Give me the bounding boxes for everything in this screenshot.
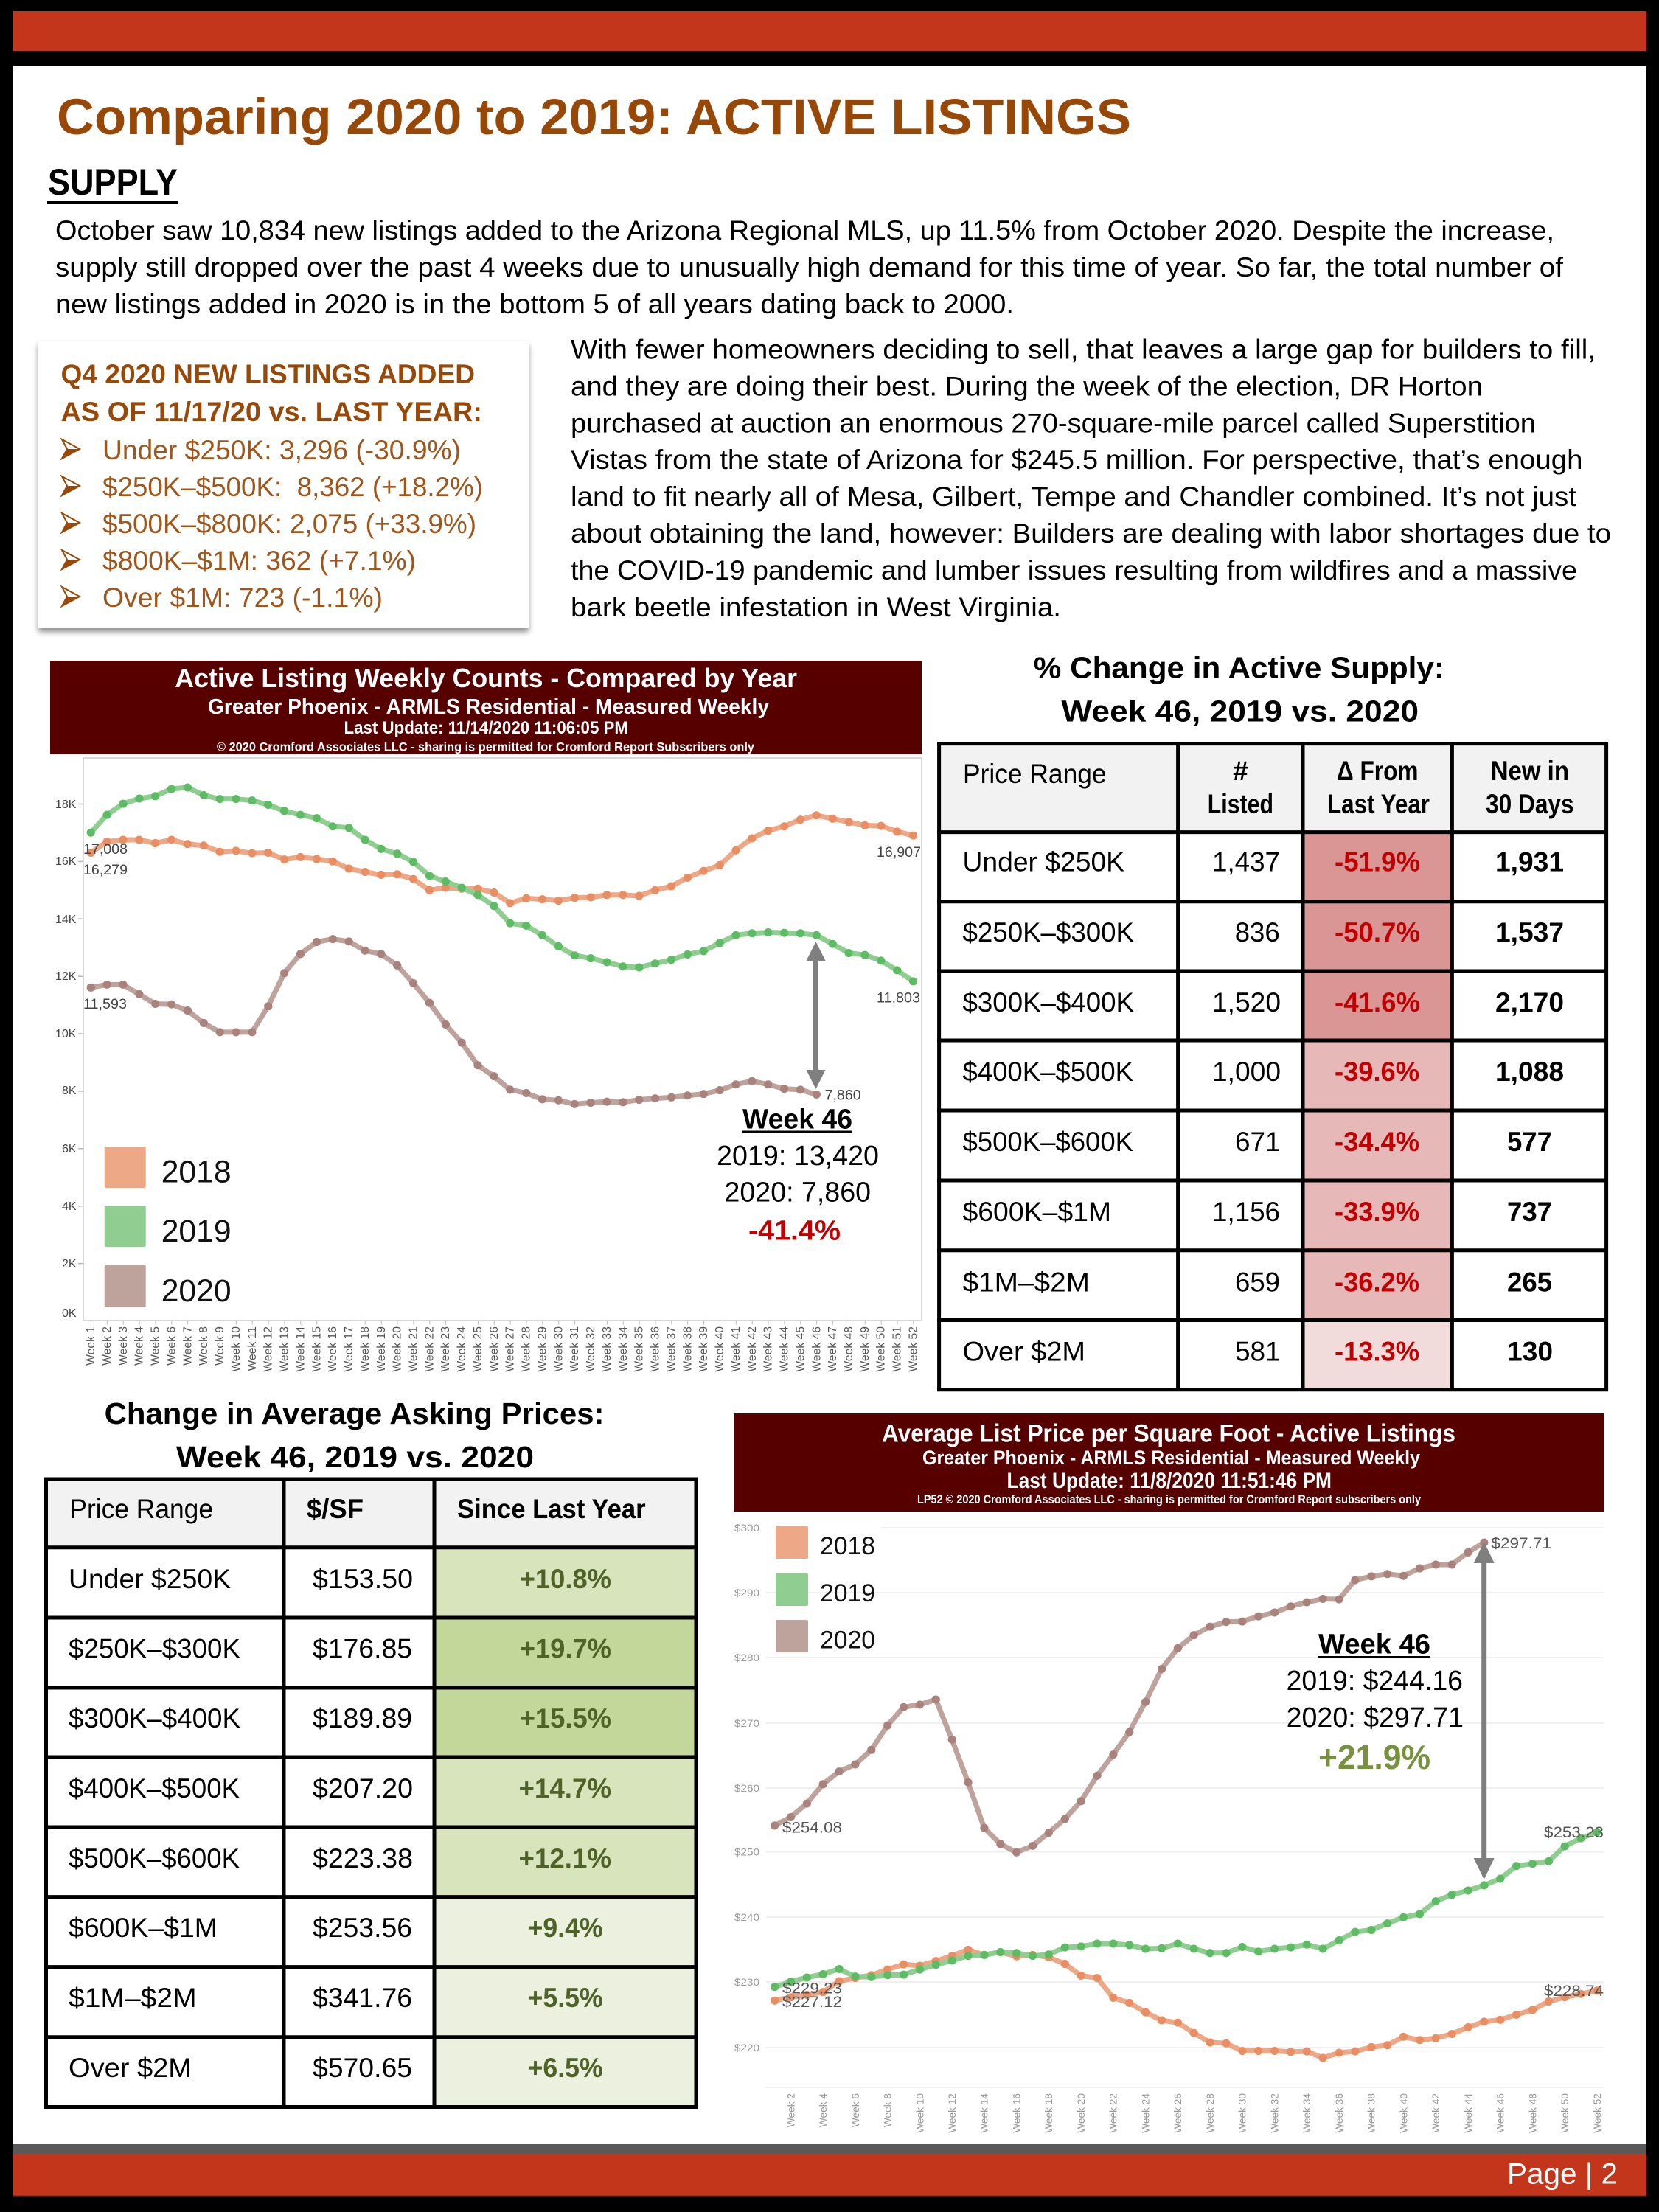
x axis labels: Week 40 xyxy=(714,1326,726,1372)
row: $600K-$1M: -33.9% xyxy=(1335,1197,1419,1227)
x axis labels: Week 18 xyxy=(359,1326,372,1372)
x axis labels: Week 24 xyxy=(456,1326,468,1372)
row: $500K-$600K: +12.1% xyxy=(519,1843,611,1874)
row: $500K-$600K: 577 xyxy=(1507,1127,1552,1157)
x axis labels: Week 6 xyxy=(165,1326,178,1366)
text block: intro paragraph: October saw 10,834 new listings added to the Arizona Regional MLS, up 11.5% from October 2020. Despite the increase, xyxy=(55,215,1554,246)
x axis labels: Week 2 xyxy=(101,1326,114,1366)
y axis labels: 8K xyxy=(62,1085,77,1097)
row: over $2M xyxy=(963,1337,1553,1367)
row: under $250K: +10.8% xyxy=(520,1564,611,1594)
panel: active listing weekly counts chart xyxy=(50,661,922,1372)
text block: builders paragraph: With fewer homeowners deciding to sell, that leaves a large gap for builders to fill, xyxy=(571,335,1596,364)
x axis labels: Week 37 xyxy=(665,1326,678,1372)
table header: Price Range xyxy=(69,1494,213,1524)
row: over $2M: $570.65 xyxy=(313,2053,412,2083)
callout: week 46 counts: 2019: 13,420 xyxy=(717,1141,879,1172)
y axis labels: 14K xyxy=(55,914,77,926)
chart header xyxy=(734,1413,1604,1512)
x axis labels: Week 44 xyxy=(1463,2093,1474,2133)
heading: supply: SUPPLY xyxy=(48,161,178,203)
chart header: Greater Phoenix - ARMLS Residential - Measured Weekly xyxy=(922,1447,1420,1469)
x axis labels: Week 6 xyxy=(850,2093,861,2127)
x axis labels: Week 27 xyxy=(504,1326,517,1372)
y axis labels: $270 xyxy=(734,1717,759,1729)
row: $1M-$2M xyxy=(69,1983,603,2013)
callout: week 46 prices xyxy=(1287,1630,1464,1776)
title: Comparing 2020 to 2019: ACTIVE LISTINGS xyxy=(57,88,1131,145)
x axis labels: Week 30 xyxy=(1237,2093,1248,2133)
x axis labels: Week 35 xyxy=(633,1326,646,1372)
row: $500K-$600K xyxy=(69,1843,611,1874)
row: $1M-$2M: 265 xyxy=(1507,1267,1552,1297)
row: $1M-$2M xyxy=(963,1267,1552,1297)
line series: 2020 xyxy=(91,939,816,1104)
table header: New in xyxy=(1491,756,1569,786)
y axis labels: $240 xyxy=(734,1911,759,1923)
data labels: 11,803 xyxy=(877,991,920,1006)
x axis labels: Week 16 xyxy=(1012,2093,1022,2133)
row: $1M-$2M: $341.76 xyxy=(313,1983,412,2013)
row: over $2M: 130 xyxy=(1507,1337,1553,1367)
legend: 2019 xyxy=(820,1579,875,1607)
callout heading xyxy=(60,359,482,427)
line series: 2020 xyxy=(774,1543,1484,1852)
row: $600K-$1M: $600K–$1M xyxy=(963,1197,1111,1227)
row: $400K-$500K: $400K–$500K xyxy=(963,1057,1133,1087)
row: $500K-$600K: $500K–$600K xyxy=(69,1843,240,1874)
heading: % change in active supply: Week 46, 2019 vs. 2020 xyxy=(1061,695,1419,728)
x axis labels: Week 13 xyxy=(279,1326,291,1372)
x axis labels: Week 12 xyxy=(262,1326,275,1372)
y axis labels: $280 xyxy=(734,1652,759,1663)
x axis labels: Week 20 xyxy=(392,1326,404,1372)
row: $300K-$400K xyxy=(69,1703,611,1733)
x axis labels: Week 28 xyxy=(1205,2093,1216,2133)
x axis labels: Week 46 xyxy=(1495,2093,1506,2133)
row: $300K-$400K: $300K–$400K xyxy=(69,1703,240,1733)
x axis labels: Week 42 xyxy=(1430,2093,1441,2133)
table header: $/SF xyxy=(307,1494,364,1524)
x axis labels: Week 14 xyxy=(979,2093,990,2133)
x axis labels: Week 44 xyxy=(779,1326,790,1372)
row: $250K-$300K: $176.85 xyxy=(313,1634,412,1664)
line series: 2018 xyxy=(91,815,914,903)
arrow: week 46 gap xyxy=(807,942,826,1089)
row: under $250K xyxy=(69,1564,611,1594)
callout heading: AS OF 11/17/20 vs. LAST YEAR: xyxy=(60,397,482,427)
x axis labels: Week 32 xyxy=(585,1326,597,1372)
row: $300K-$400K: $189.89 xyxy=(313,1703,412,1733)
text block: builders paragraph: Vistas from the state of Arizona for $245.5 million. For perspective, that’s enough xyxy=(571,445,1582,475)
x axis labels: Week 9 xyxy=(214,1326,226,1366)
row: $400K-$500K: +14.7% xyxy=(519,1773,611,1804)
x axis labels: Week 41 xyxy=(730,1326,742,1372)
legend xyxy=(776,1526,875,1655)
line series: 2019 xyxy=(774,1832,1597,1987)
line series: 2018 xyxy=(774,1950,1597,2058)
table header: Price Range xyxy=(963,759,1107,789)
x axis labels xyxy=(85,1326,920,1372)
row: under $250K: -51.9% xyxy=(1335,847,1420,877)
row: $600K-$1M: $253.56 xyxy=(313,1913,412,1943)
x axis labels: Week 5 xyxy=(150,1326,162,1366)
panel: average list price per square foot chart xyxy=(734,1413,1604,2133)
data labels: $228.74 xyxy=(1544,1983,1604,2000)
y axis labels: 12K xyxy=(55,970,77,983)
page number: Page | 2 xyxy=(1507,2158,1618,2191)
text block: builders paragraph xyxy=(571,335,1611,622)
legend: 2020 xyxy=(820,1627,875,1655)
row: $600K-$1M xyxy=(963,1197,1552,1227)
text block: builders paragraph: about obtaining the land, however: Builders are dealing with labor shortages due to xyxy=(571,518,1611,549)
x axis labels: Week 30 xyxy=(552,1326,565,1372)
x axis labels: Week 48 xyxy=(843,1326,855,1372)
bottom footer bar xyxy=(13,2144,1646,2196)
x axis labels: Week 10 xyxy=(230,1326,243,1372)
callout: week 46 counts: 2020: 7,860 xyxy=(724,1177,871,1208)
callout: week 46 counts xyxy=(717,1105,879,1246)
row: over $2M: -13.3% xyxy=(1335,1337,1419,1367)
x axis labels: Week 36 xyxy=(650,1326,662,1372)
x axis labels: Week 34 xyxy=(1301,2093,1312,2133)
data labels: $229.23 xyxy=(782,1980,842,1997)
x axis labels: Week 51 xyxy=(891,1326,904,1372)
x axis labels: Week 33 xyxy=(601,1326,613,1372)
x axis labels: Week 7 xyxy=(181,1326,194,1366)
x axis labels: Week 11 xyxy=(246,1326,259,1371)
callout: week 46 prices: 2020: $297.71 xyxy=(1287,1703,1464,1733)
data labels: 16,279 xyxy=(83,863,128,878)
text block: builders paragraph: land to fit nearly all of Mesa, Gilbert, Tempe and Chandler combined. It’s not just xyxy=(571,481,1577,512)
y axis labels: $290 xyxy=(734,1587,759,1599)
row: $300K-$400K: $300K–$400K xyxy=(963,987,1134,1018)
line series: 2019 xyxy=(91,787,914,981)
x axis labels: Week 22 xyxy=(423,1326,436,1372)
y axis labels: 0K xyxy=(62,1307,77,1320)
heading: % change in active supply xyxy=(1034,651,1444,728)
x axis labels: Week 47 xyxy=(827,1326,839,1372)
callout bullet: $800K-$1M: $800K–$1M: 362 (+7.1%) xyxy=(102,546,416,576)
callout bullet: $500K-$800K: $500K–$800K: 2,075 (+33.9%) xyxy=(102,509,476,539)
legend: 2018 xyxy=(820,1532,875,1560)
x axis labels: Week 3 xyxy=(117,1326,130,1366)
row: $600K-$1M: $600K–$1M xyxy=(69,1913,218,1943)
x axis labels: Week 19 xyxy=(375,1326,388,1372)
row: under $250K: 1,437 xyxy=(1212,847,1280,877)
x axis labels: Week 16 xyxy=(327,1326,339,1372)
x axis labels: Week 48 xyxy=(1527,2093,1538,2133)
heading: change in average asking prices: Week 46, 2019 vs. 2020 xyxy=(176,1440,534,1474)
row: $500K-$600K: -34.4% xyxy=(1335,1127,1419,1157)
data labels: $297.71 xyxy=(1491,1535,1551,1552)
y axis labels: 10K xyxy=(55,1028,77,1040)
legend: 2019 xyxy=(161,1214,232,1249)
callout bullet: under $250K: Under $250K: 3,296 (-30.9%) xyxy=(102,435,461,465)
row: $300K-$400K: 1,520 xyxy=(1212,987,1281,1018)
y axis labels: $260 xyxy=(734,1782,759,1794)
row: $300K-$400K: +15.5% xyxy=(520,1703,611,1733)
row: $500K-$600K xyxy=(963,1127,1552,1157)
y axis labels: 18K xyxy=(55,799,77,811)
row: under $250K: 1,931 xyxy=(1495,847,1564,877)
y axis labels: 16K xyxy=(55,855,77,868)
table header xyxy=(69,1494,646,1524)
data labels xyxy=(83,842,921,1104)
x axis labels: Week 26 xyxy=(1172,2093,1183,2133)
x axis labels xyxy=(785,2093,1603,2133)
x axis labels: Week 45 xyxy=(794,1326,807,1372)
x axis labels: Week 39 xyxy=(698,1326,710,1372)
x axis labels: Week 8 xyxy=(198,1326,210,1366)
x axis labels: Week 1 xyxy=(85,1326,97,1366)
callout: week 46 counts: Week 46 xyxy=(742,1105,852,1135)
row: $250K-$300K: 1,537 xyxy=(1495,917,1564,947)
row: $300K-$400K: 2,170 xyxy=(1495,987,1564,1018)
row: $250K-$300K: 836 xyxy=(1235,917,1280,947)
row: $250K-$300K: $250K–$300K xyxy=(69,1634,240,1664)
row: over $2M: Over $2M xyxy=(963,1337,1085,1367)
row: $1M-$2M: -36.2% xyxy=(1335,1267,1419,1297)
x axis labels: Week 38 xyxy=(681,1326,694,1372)
x axis labels: Week 24 xyxy=(1140,2093,1151,2133)
data labels: $227.12 xyxy=(782,1994,842,2011)
x axis labels: Week 36 xyxy=(1334,2093,1345,2133)
callout: week 46 prices: Week 46 xyxy=(1318,1630,1430,1660)
x axis labels: Week 17 xyxy=(343,1326,355,1372)
row: $400K-$500K: $207.20 xyxy=(313,1773,413,1804)
row: $250K-$300K xyxy=(69,1634,611,1664)
x axis labels: Week 43 xyxy=(762,1326,775,1372)
table header: # xyxy=(1233,756,1248,786)
callout heading: Q4 2020 NEW LISTINGS ADDED xyxy=(60,359,475,389)
row: $600K-$1M: 1,156 xyxy=(1212,1197,1280,1227)
row: over $2M: 581 xyxy=(1235,1337,1280,1367)
x axis labels: Week 18 xyxy=(1043,2093,1054,2133)
data labels: $254.08 xyxy=(782,1820,842,1836)
data labels xyxy=(782,1535,1604,2011)
y axis labels: 2K xyxy=(62,1258,77,1270)
chart header: Active Listing Weekly Counts - Compared by Year xyxy=(175,663,797,693)
x axis labels: Week 23 xyxy=(439,1326,452,1372)
x axis labels: Week 10 xyxy=(914,2093,925,2133)
chart header: Last Update: 11/14/2020 11:06:05 PM xyxy=(344,718,628,738)
x axis labels: Week 4 xyxy=(818,2093,829,2127)
chart header: © 2020 Cromford Associates LLC - sharing is permitted for Cromford Report Subscribers only xyxy=(217,740,755,754)
chart header xyxy=(50,661,922,754)
row: under $250K: Under $250K xyxy=(69,1564,231,1594)
row: under $250K xyxy=(963,847,1564,877)
row: $1M-$2M: $1M–$2M xyxy=(963,1267,1090,1297)
row: $500K-$600K: $223.38 xyxy=(313,1843,413,1874)
row: $250K-$300K: +19.7% xyxy=(520,1634,611,1664)
x axis labels: Week 50 xyxy=(1559,2093,1571,2133)
text block: intro paragraph: new listings added in 2020 is in the bottom 5 of all years dating back to 2000. xyxy=(55,289,1014,319)
x axis labels: Week 8 xyxy=(882,2093,894,2127)
callout: week 46 prices: +21.9% xyxy=(1318,1738,1430,1776)
chart header: Greater Phoenix - ARMLS Residential - Measured Weekly xyxy=(208,695,769,719)
text block: builders paragraph: bark beetle infestation in West Virginia. xyxy=(571,592,1061,622)
row: $300K-$400K xyxy=(963,987,1564,1018)
x axis labels: Week 21 xyxy=(407,1326,420,1372)
y axis labels: $230 xyxy=(734,1976,759,1988)
x axis labels: Week 38 xyxy=(1366,2093,1377,2133)
y axis labels: 4K xyxy=(62,1200,77,1213)
x axis labels: Week 28 xyxy=(521,1326,533,1372)
data labels: 7,860 xyxy=(825,1088,861,1104)
y axis labels: $250 xyxy=(734,1846,759,1858)
top red banner xyxy=(13,11,1646,51)
x axis labels: Week 25 xyxy=(472,1326,484,1372)
x axis labels: Week 26 xyxy=(488,1326,501,1372)
callout: week 46 prices: 2019: $244.16 xyxy=(1287,1666,1463,1697)
y axis labels xyxy=(734,1522,759,2053)
y axis labels: $300 xyxy=(734,1522,759,1534)
row: over $2M: Over $2M xyxy=(69,2053,192,2083)
y axis labels: 6K xyxy=(62,1143,77,1155)
x axis labels: Week 34 xyxy=(617,1326,630,1372)
row: $400K-$500K: 1,088 xyxy=(1495,1057,1564,1087)
x axis labels: Week 40 xyxy=(1398,2093,1409,2133)
x axis labels: Week 20 xyxy=(1076,2093,1087,2133)
x axis labels: Week 14 xyxy=(294,1326,307,1372)
row: $400K-$500K xyxy=(963,1057,1564,1087)
x axis labels: Week 52 xyxy=(1592,2093,1603,2133)
panel: Q4 2020 new listings callout xyxy=(38,341,529,628)
x axis labels: Week 4 xyxy=(133,1326,146,1366)
legend xyxy=(105,1147,232,1309)
row: $1M-$2M: 659 xyxy=(1235,1267,1280,1297)
table header: 30 Days xyxy=(1486,789,1574,819)
row: over $2M xyxy=(69,2053,603,2083)
table header: Since Last Year xyxy=(457,1494,646,1524)
row: $600K-$1M xyxy=(69,1913,603,1943)
x axis labels: Week 31 xyxy=(568,1326,581,1372)
row: under $250K: $153.50 xyxy=(313,1564,413,1594)
x axis labels: Week 15 xyxy=(310,1326,323,1372)
table: asking prices by price range xyxy=(44,1478,698,2109)
row: $600K-$1M: +9.4% xyxy=(528,1913,603,1943)
row: under $250K: Under $250K xyxy=(963,847,1124,877)
arrow: week 46 gap xyxy=(1474,1542,1495,1879)
x axis labels: Week 32 xyxy=(1269,2093,1280,2133)
row: $500K-$600K: $500K–$600K xyxy=(963,1127,1133,1157)
table header xyxy=(963,756,1574,819)
chart header: LP52 © 2020 Cromford Associates LLC - sharing is permitted for Cromford Report subscribers only xyxy=(917,1492,1421,1506)
text block: builders paragraph: and they are doing their best. During the week of the election, DR Horton xyxy=(571,372,1483,401)
callout bullet: over $1M: Over $1M: 723 (-1.1%) xyxy=(102,582,383,613)
callout bullet: $250K-$500K: $250K–$500K: 8,362 (+18.2%) xyxy=(102,472,483,502)
x axis labels: Week 46 xyxy=(810,1326,823,1372)
y axis labels: $220 xyxy=(734,2042,759,2053)
row: $400K-$500K: 1,000 xyxy=(1212,1057,1281,1087)
row: $500K-$600K: 671 xyxy=(1235,1127,1280,1157)
x axis labels: Week 22 xyxy=(1108,2093,1119,2133)
row: $300K-$400K: -41.6% xyxy=(1335,987,1420,1018)
row: $1M-$2M: $1M–$2M xyxy=(69,1983,197,2013)
text block: intro paragraph: supply still dropped over the past 4 weeks due to unusually high demand for this time of year. So far, the total number of xyxy=(55,252,1564,282)
row: $400K-$500K: -39.6% xyxy=(1335,1057,1419,1087)
row: $400K-$500K: $400K–$500K xyxy=(69,1773,240,1804)
x axis labels: Week 49 xyxy=(859,1326,872,1372)
data labels: $253.23 xyxy=(1544,1824,1604,1841)
text block: intro paragraph xyxy=(55,215,1564,319)
x axis labels: Week 50 xyxy=(875,1326,888,1372)
table header: Listed xyxy=(1208,789,1273,819)
text block: builders paragraph: the COVID-19 pandemic and lumber issues resulting from wildfires and a massive xyxy=(571,555,1577,585)
table header: Last Year xyxy=(1327,789,1430,819)
heading: change in average asking prices: Change in Average Asking Prices: xyxy=(105,1397,605,1430)
heading: change in average asking prices xyxy=(105,1397,605,1474)
legend: 2020 xyxy=(161,1273,232,1309)
row: $250K-$300K xyxy=(963,917,1564,947)
data labels: 17,008 xyxy=(83,842,128,858)
table header: Δ From xyxy=(1337,756,1419,786)
row: $1M-$2M: +5.5% xyxy=(528,1983,603,2013)
row: $400K-$500K xyxy=(69,1773,611,1804)
chart header: Last Update: 11/8/2020 11:51:46 PM xyxy=(1007,1469,1332,1493)
x axis labels: Week 52 xyxy=(907,1326,920,1372)
data labels: 11,593 xyxy=(83,997,127,1012)
legend: 2018 xyxy=(161,1155,232,1190)
callout: week 46 counts: -41.4% xyxy=(748,1215,841,1246)
row: $600K-$1M: 737 xyxy=(1507,1197,1552,1227)
x axis labels: Week 29 xyxy=(537,1326,549,1372)
x axis labels: Week 12 xyxy=(947,2093,958,2133)
row: over $2M: +6.5% xyxy=(528,2053,603,2083)
x axis labels: Week 2 xyxy=(785,2093,796,2127)
x axis labels: Week 42 xyxy=(746,1326,759,1372)
data labels: 16,907 xyxy=(877,845,921,860)
row: $250K-$300K: -50.7% xyxy=(1335,917,1420,947)
y axis labels xyxy=(55,799,77,1320)
table: active supply by price range xyxy=(937,742,1608,1391)
heading: % change in active supply: % Change in Active Supply: xyxy=(1034,651,1444,685)
text block: builders paragraph: purchased at auction an enormous 270-square-mile parcel called Superstition xyxy=(571,408,1536,438)
row: $250K-$300K: $250K–$300K xyxy=(963,917,1134,947)
chart header: Average List Price per Square Foot - Active Listings xyxy=(882,1420,1455,1448)
